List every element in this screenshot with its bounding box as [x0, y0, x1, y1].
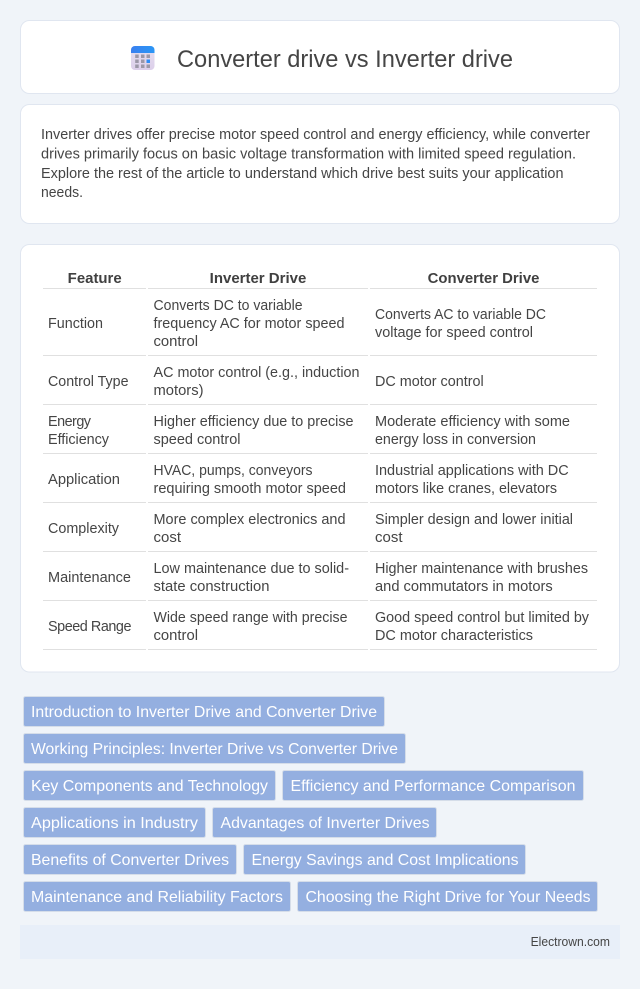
row: function: control [154, 334, 198, 350]
tag: benefits [24, 844, 236, 874]
tag: advantages [212, 808, 436, 838]
row: energy efficiency: energy loss in conversion [375, 432, 536, 448]
row: application: Application [48, 472, 120, 488]
tag: introduction: Introduction to Inverter Drive and Converter Drive [31, 704, 377, 721]
row: control type: Control Type [48, 374, 128, 390]
row: application: HVAC, pumps, conveyors [154, 463, 312, 479]
row: speed range: Speed Range [48, 619, 132, 635]
row: control type: AC motor control (e.g., induction [154, 365, 360, 381]
row: maintenance: state construction [154, 579, 270, 595]
tag: working principles [24, 734, 406, 764]
table header row: Converter Drive [428, 271, 539, 287]
row: maintenance: Higher maintenance with brushes [375, 561, 588, 577]
row: speed range: Good speed control but limited by [375, 610, 590, 626]
row: energy efficiency: Higher efficiency due to precise [154, 414, 354, 430]
row: control type: DC motor control [375, 374, 484, 390]
row: energy efficiency: Efficiency [48, 432, 110, 448]
intro text: drives primarily focus on basic voltage transformation with limited speed regulation. [41, 146, 576, 162]
row: function: Converts AC to variable DC [375, 307, 546, 323]
row: energy efficiency: Moderate efficiency with some [375, 414, 570, 430]
row: maintenance: Low maintenance due to solid- [154, 561, 349, 577]
row: application [43, 463, 597, 503]
tag: energy savings [244, 844, 526, 874]
intro panel [20, 104, 620, 224]
row: maintenance [43, 561, 597, 601]
tag: applications: Applications in Industry [31, 815, 198, 832]
tag: energy savings: Energy Savings and Cost Implications [252, 852, 518, 869]
tag: advantages: Advantages of Inverter Drives [220, 815, 430, 832]
row: function: frequency AC for motor speed [154, 316, 344, 332]
footer [20, 925, 620, 959]
row: complexity: cost [154, 530, 181, 546]
row: application: Industrial applications with DC [375, 463, 569, 479]
table header row [43, 271, 597, 289]
row: function: voltage for speed control [375, 325, 533, 341]
intro text [41, 127, 590, 201]
tag: efficiency [282, 770, 584, 800]
footer: Electrown.com [531, 934, 610, 949]
row: application: requiring smooth motor speed [154, 481, 346, 497]
tag: working principles: Working Principles: Inverter Drive vs Converter Drive [31, 741, 398, 758]
row: control type: motors) [154, 383, 204, 399]
topic tags [24, 696, 598, 912]
tag: efficiency: Efficiency and Performance Comparison [290, 778, 576, 795]
row: complexity: Simpler design and lower initial [375, 512, 573, 528]
tag: maintenance [24, 882, 290, 912]
row: complexity: More complex electronics and [154, 512, 346, 528]
row: speed range: DC motor characteristics [375, 628, 533, 644]
tag: applications [24, 808, 206, 838]
tag: choosing: Choosing the Right Drive for Your Needs [306, 889, 590, 906]
row: function: Function [48, 316, 103, 332]
icon: calendar [131, 46, 154, 70]
intro text: Inverter drives offer precise motor speed control and energy efficiency, while converter [41, 127, 590, 143]
table header row: Inverter Drive [210, 271, 306, 287]
tag: key components [24, 770, 276, 800]
comparison table panel [20, 244, 620, 672]
row: control type [43, 365, 597, 405]
header panel [20, 20, 620, 94]
row: function [43, 298, 597, 356]
tag: choosing [298, 882, 598, 912]
tag: introduction [24, 696, 384, 726]
row: application: motors like cranes, elevators [375, 481, 557, 497]
row: energy efficiency: Energy [48, 414, 92, 430]
row: speed range: control [154, 628, 198, 644]
row: energy efficiency: speed control [154, 432, 240, 448]
tag: maintenance: Maintenance and Reliability Factors [31, 889, 283, 906]
intro text: needs. [41, 185, 83, 201]
row: energy efficiency [43, 414, 597, 454]
tag: key components: Key Components and Technology [31, 778, 268, 795]
row: function: Converts DC to variable [154, 298, 302, 314]
row: maintenance: Maintenance [48, 570, 131, 586]
table header row: Feature [68, 271, 122, 287]
row: speed range [43, 610, 597, 650]
intro text: Explore the rest of the article to understand which drive best suits your application [41, 166, 564, 182]
title: Converter drive vs Inverter drive [177, 46, 513, 73]
row: maintenance: and commutators in motors [375, 579, 553, 595]
row: complexity [43, 512, 597, 552]
row: complexity: cost [375, 530, 402, 546]
row: speed range: Wide speed range with precise [154, 610, 348, 626]
row: complexity: Complexity [48, 521, 120, 537]
tag: benefits: Benefits of Converter Drives [31, 852, 229, 869]
